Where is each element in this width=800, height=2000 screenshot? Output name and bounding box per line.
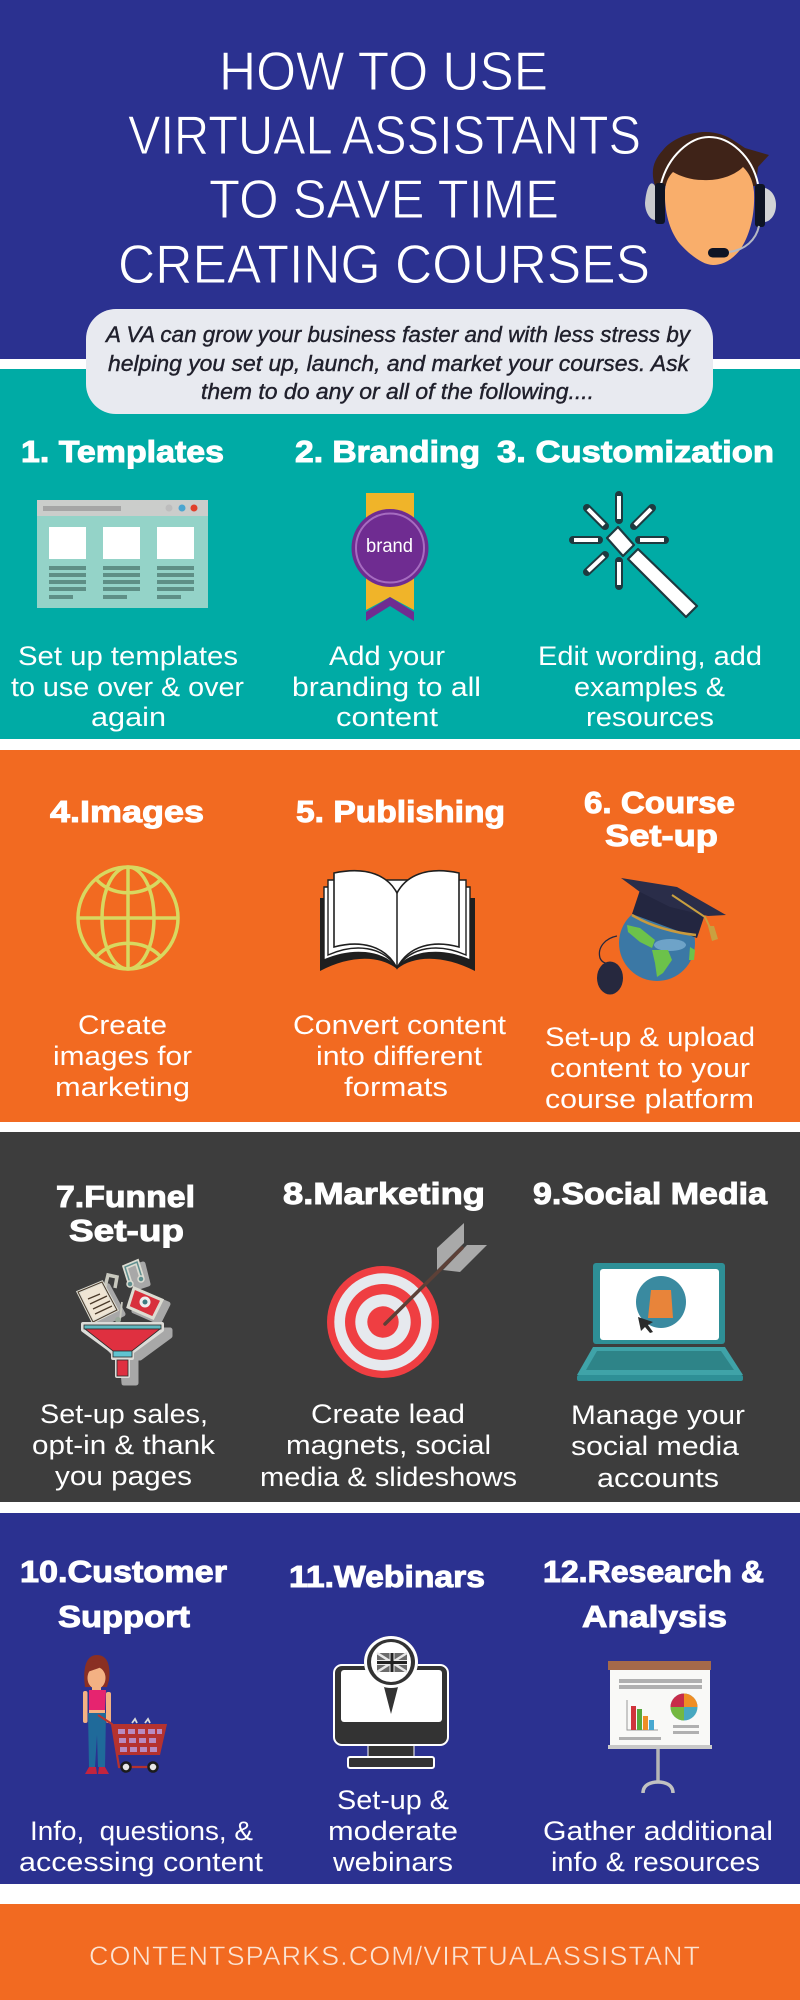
- description: research and analysis: Gather additional: [543, 1816, 773, 1846]
- heading: 10.Customer Support: 10.Customer: [20, 1554, 227, 1589]
- heading: 9.Social Media: 9.Social Media: [533, 1176, 768, 1211]
- description: customer support: [19, 1816, 264, 1877]
- icon: woman with shopping cart: [83, 1655, 167, 1774]
- icon: laptop with shopping bag: [577, 1263, 743, 1381]
- heading: 10.Customer Support: Support: [58, 1599, 190, 1634]
- description: templates: to use over & over: [11, 672, 244, 702]
- item 10: customer support: [19, 1554, 264, 1877]
- heading: 8.Marketing: 8.Marketing: [283, 1176, 485, 1211]
- icon: globe with graduation cap and mouse: [597, 878, 726, 994]
- description: marketing: [260, 1399, 517, 1492]
- heading: 11.Webinars: 11.Webinars: [289, 1559, 485, 1594]
- description: images: Create: [78, 1010, 167, 1040]
- icon: sales funnel with documents and media: [78, 1262, 170, 1383]
- heading: 6. Course Set-up: 6. Course: [584, 785, 735, 820]
- description: research and analysis: [543, 1816, 773, 1877]
- item 12: research and analysis: [543, 1554, 773, 1877]
- description: publishing: Convert content: [293, 1010, 507, 1040]
- panel: dark section, items 7 to 9: [0, 1132, 800, 1502]
- footer url: CONTENTSPARKS.COM/VIRTUALASSISTANT: [89, 1941, 700, 1971]
- description: webinars: webinars: [332, 1847, 453, 1877]
- item 6: course set-up: [545, 785, 755, 1114]
- description: funnel set-up: opt-in & thank: [32, 1430, 216, 1460]
- description: templates: Set up templates: [18, 641, 238, 671]
- icon: open book: [320, 871, 475, 971]
- description: templates: again: [91, 702, 166, 732]
- icon: target with arrow: [327, 1223, 487, 1378]
- description: customization: [538, 641, 762, 732]
- title: [118, 40, 650, 295]
- description: webinars: Set-up &: [337, 1785, 449, 1815]
- description: templates: [11, 641, 244, 732]
- description: marketing: Create lead: [311, 1399, 465, 1429]
- description: customer support: Info, questions, &: [30, 1816, 253, 1846]
- description: branding: Add your: [329, 641, 445, 671]
- heading: 10.Customer Support: [20, 1554, 227, 1634]
- icon: virtual assistant with headset: [645, 132, 776, 265]
- description: marketing: magnets, social: [286, 1430, 491, 1460]
- description: marketing: media & slideshows: [260, 1462, 517, 1492]
- description: research and analysis: info & resources: [551, 1847, 760, 1877]
- heading: 6. Course Set-up: Set-up: [605, 818, 718, 853]
- heading: 7.Funnel Set-up: 7.Funnel: [56, 1179, 195, 1214]
- description: customization: resources: [586, 702, 714, 732]
- description: funnel set-up: [32, 1399, 216, 1491]
- description: images: [53, 1010, 192, 1102]
- description: webinars: [328, 1785, 458, 1877]
- heading: 7.Funnel Set-up: [56, 1179, 195, 1248]
- heading: 4.Images: 4.Images: [50, 794, 204, 829]
- panel: teal section, items 1 to 3: [0, 369, 800, 739]
- item 3: customization: [497, 434, 774, 732]
- panel: orange section, items 4 to 6: [0, 750, 800, 1122]
- description: funnel set-up: you pages: [55, 1461, 192, 1491]
- description: social media: [571, 1400, 745, 1493]
- heading: 2. Branding: 2. Branding: [295, 434, 480, 469]
- intro callout: helping you set up, launch, and market your courses. Ask: [108, 351, 690, 376]
- icon: wireframe globe: [78, 867, 178, 969]
- item 7: funnel set-up: [32, 1179, 216, 1491]
- description: branding: content: [336, 702, 439, 732]
- intro callout: [86, 309, 713, 414]
- description: customer support: accessing content: [19, 1847, 264, 1877]
- panel: header: [0, 0, 800, 359]
- heading: 1. Templates: 1. Templates: [21, 434, 224, 469]
- description: images: images for: [53, 1041, 192, 1071]
- icon: magic wand: [573, 495, 697, 617]
- description: publishing: formats: [344, 1072, 448, 1102]
- description: webinars: moderate: [328, 1816, 458, 1846]
- icon: web page template: [37, 500, 208, 608]
- description: funnel set-up: Set-up sales,: [40, 1399, 208, 1429]
- item 9: social media: [533, 1176, 768, 1493]
- description: customization: examples &: [574, 672, 725, 702]
- item 11: webinars: [289, 1559, 485, 1877]
- description: social media: Manage your: [571, 1400, 745, 1430]
- description: course set-up: [545, 1022, 755, 1114]
- description: publishing: into different: [316, 1041, 483, 1071]
- item 8: marketing: [260, 1176, 517, 1492]
- title: VIRTUAL ASSISTANTS: [128, 104, 641, 166]
- icon: brand ribbon badge: [352, 493, 428, 621]
- icon: monitor with location pin: [334, 1636, 448, 1768]
- description: branding: [292, 641, 481, 732]
- title: TO SAVE TIME: [209, 168, 559, 230]
- title: CREATING COURSES: [118, 233, 650, 295]
- description: course set-up: Set-up & upload: [545, 1022, 755, 1052]
- intro callout: them to do any or all of the following....: [201, 379, 594, 404]
- item 4: images: [50, 794, 204, 1102]
- description: course set-up: course platform: [545, 1084, 754, 1114]
- description: publishing: [293, 1010, 507, 1102]
- heading: 12.Research & Analysis: 12.Research &: [543, 1554, 764, 1589]
- description: images: marketing: [55, 1072, 190, 1102]
- item 2: branding: [292, 434, 481, 732]
- title: HOW TO USE: [219, 40, 548, 102]
- heading: 6. Course Set-up: [584, 785, 735, 853]
- description: branding: branding to all: [292, 672, 481, 702]
- description: course set-up: content to your: [550, 1053, 750, 1083]
- description: customization: Edit wording, add: [538, 641, 762, 671]
- icon: brand ribbon badge: brand: [366, 536, 413, 557]
- panel: footer: [0, 1904, 800, 2000]
- panel: navy section, items 10 to 12: [0, 1513, 800, 1884]
- heading: 3. Customization: 3. Customization: [497, 434, 774, 469]
- heading: 12.Research & Analysis: Analysis: [582, 1599, 727, 1634]
- heading: 5. Publishing: 5. Publishing: [296, 794, 505, 829]
- item 5: publishing: [293, 794, 507, 1102]
- item 1: templates: [11, 434, 244, 732]
- heading: 7.Funnel Set-up: Set-up: [69, 1213, 184, 1248]
- icon: presentation board with charts: [608, 1661, 712, 1793]
- description: social media: social media: [571, 1431, 740, 1461]
- heading: 12.Research & Analysis: [543, 1554, 764, 1634]
- intro callout: A VA can grow your business faster and with less stress by: [104, 322, 692, 347]
- description: social media: accounts: [597, 1463, 719, 1493]
